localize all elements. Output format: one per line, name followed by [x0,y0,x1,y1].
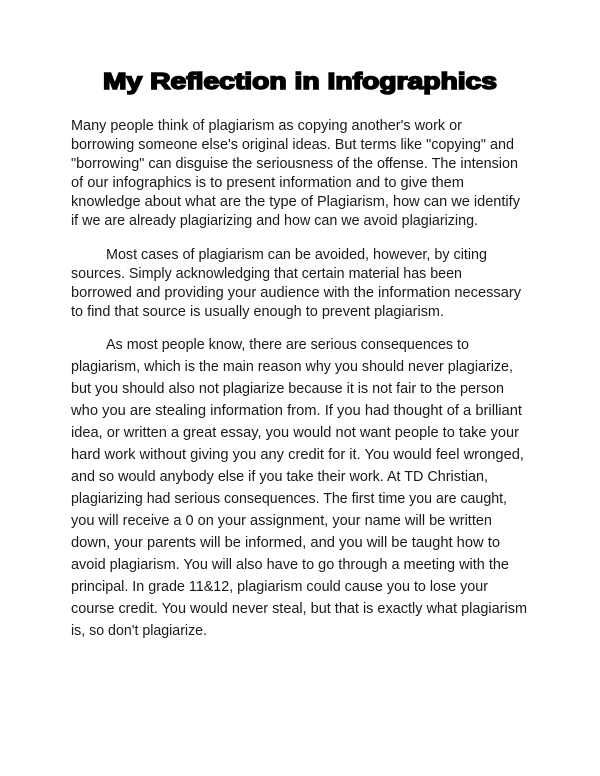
text block: citing sources paragraph: borrowed and providing your audience with the information necessary [71,284,521,301]
text block: citing sources paragraph [71,246,521,320]
text block: intro paragraph: of our infographics is to present information and to give them [71,174,464,191]
text block: consequences paragraph: avoid plagiarism. You will also have to go through a meeting with the [71,556,509,573]
text block: consequences paragraph: and so would anybody else if you take their work. At TD Christian, [71,468,488,485]
text block: citing sources paragraph: Most cases of plagiarism can be avoided, however, by citing [106,246,487,263]
title: My Reflection in Infographics [103,68,497,94]
text block: consequences paragraph [70,336,527,639]
text block: consequences paragraph: idea, or written a great essay, you would not want people to take your [71,424,519,441]
text block: intro paragraph: borrowing someone else's original ideas. But terms like "copying" and [71,136,514,153]
text block: intro paragraph: knowledge about what are the type of Plagiarism, how can we identify [71,193,520,210]
text block: consequences paragraph: down, your parents will be informed, and you will be taught how to [71,534,500,551]
text block: consequences paragraph: plagiarizing had serious consequences. The first time you are caught, [71,490,507,507]
text block: citing sources paragraph: to find that source is usually enough to prevent plagiarism. [71,303,444,320]
text block: intro paragraph: "borrowing" can disguise the seriousness of the offense. The intension [71,155,518,172]
text block: citing sources paragraph: sources. Simply acknowledging that certain material has been [71,265,462,282]
text block: consequences paragraph: principal. In grade 11&12, plagiarism could cause you to lose your [71,578,488,595]
text block: consequences paragraph: you will receive a 0 on your assignment, your name will be written [71,512,492,529]
text block: consequences paragraph: is, so don't plagiarize. [71,622,207,639]
text block: consequences paragraph: As most people know, there are serious consequences to [106,336,469,353]
text block: consequences paragraph: but you should also not plagiarize because it is not fair to the person [71,380,504,397]
text block: intro paragraph: Many people think of plagiarism as copying another's work or [71,117,462,134]
text block: consequences paragraph: hard work without giving you any credit for it. You would feel wronged, [71,446,524,463]
text block: intro paragraph [71,117,520,229]
text block: consequences paragraph: who you are stealing information from. If you had thought of a brilliant [70,402,523,419]
text block: intro paragraph: if we are already plagiarizing and how can we avoid plagiarizing. [71,212,478,229]
text block: consequences paragraph: plagiarism, which is the main reason why you should never plagiarize, [71,358,513,375]
text block: consequences paragraph: course credit. You would never steal, but that is exactly what plagiarism [71,600,527,617]
